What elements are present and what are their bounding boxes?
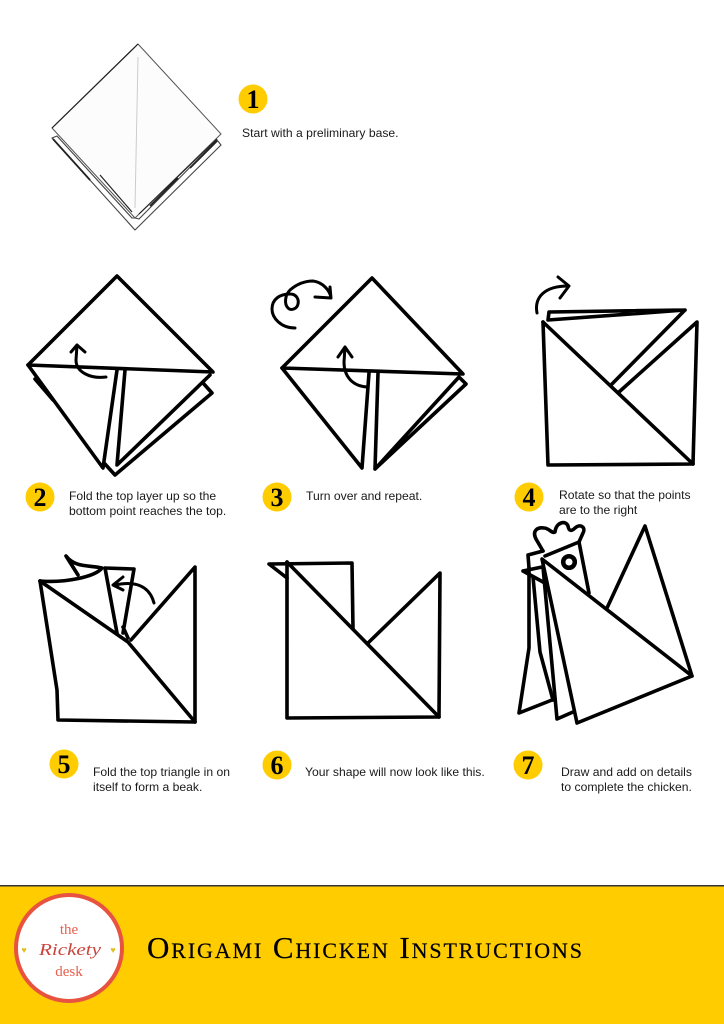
step 1 number badge: [238, 84, 268, 114]
arrow: fold up: [338, 347, 367, 387]
step 6 number badge: 6: [270, 751, 284, 780]
step 2 text: bottom point reaches the top.: [69, 504, 226, 518]
step 1 text: Start with a preliminary base.: [242, 126, 399, 140]
arrow: rotate: [537, 277, 569, 313]
step 2 text: Fold the top layer up so the: [69, 489, 216, 503]
step 6 diagram: [269, 562, 440, 718]
arrow: fold beak: [113, 577, 154, 603]
logo: the rickety desk: ♥: [110, 945, 116, 955]
step 4 text: are to the right: [559, 503, 638, 517]
step 3 number badge: [262, 482, 292, 512]
step 5 number badge: [50, 750, 78, 779]
arrow: turn over spiral: [272, 281, 331, 328]
arrow: fold up: [71, 345, 106, 377]
step 7 text: to complete the chicken.: [561, 780, 692, 794]
step 3 diagram: [272, 278, 466, 469]
step 1 diagram: preliminary base: [52, 44, 221, 230]
chicken eye: [563, 556, 575, 568]
step 6 number badge: [262, 750, 292, 780]
step 5 diagram: [40, 556, 195, 722]
logo: the rickety desk: [16, 895, 122, 1001]
step 7 diagram: finished chicken: [519, 523, 692, 723]
step 3 number badge: 3: [270, 483, 284, 512]
title: Origami Chicken Instructions: [147, 930, 582, 965]
step 2 number badge: [26, 482, 54, 512]
step 4 text: Rotate so that the points: [559, 488, 691, 502]
step 1 number badge: 1: [246, 85, 260, 114]
step 2 diagram: [28, 276, 213, 475]
step 5 text: itself to form a beak.: [93, 780, 202, 794]
logo: the rickety desk: Rickety: [38, 940, 102, 959]
step 5 text: Fold the top triangle in on: [93, 765, 230, 779]
step 4 diagram: [537, 277, 697, 465]
step 7 number badge: [514, 750, 542, 780]
step 4 number badge: 4: [522, 483, 536, 512]
footer banner: [0, 885, 724, 1024]
chicken comb: [535, 523, 584, 551]
step 6 text: Your shape will now look like this.: [305, 765, 485, 779]
step 3 text: Turn over and repeat.: [306, 489, 422, 503]
step 4 number badge: [514, 482, 544, 512]
logo: the rickety desk: desk: [55, 964, 83, 980]
step 2 number badge: 2: [34, 483, 46, 512]
step 5 number badge: 5: [58, 750, 70, 779]
logo: the rickety desk: the: [60, 922, 79, 938]
logo: the rickety desk: ♥: [21, 945, 27, 955]
step 7 number badge: 7: [522, 751, 534, 780]
step 7 text: Draw and add on details: [561, 765, 692, 779]
